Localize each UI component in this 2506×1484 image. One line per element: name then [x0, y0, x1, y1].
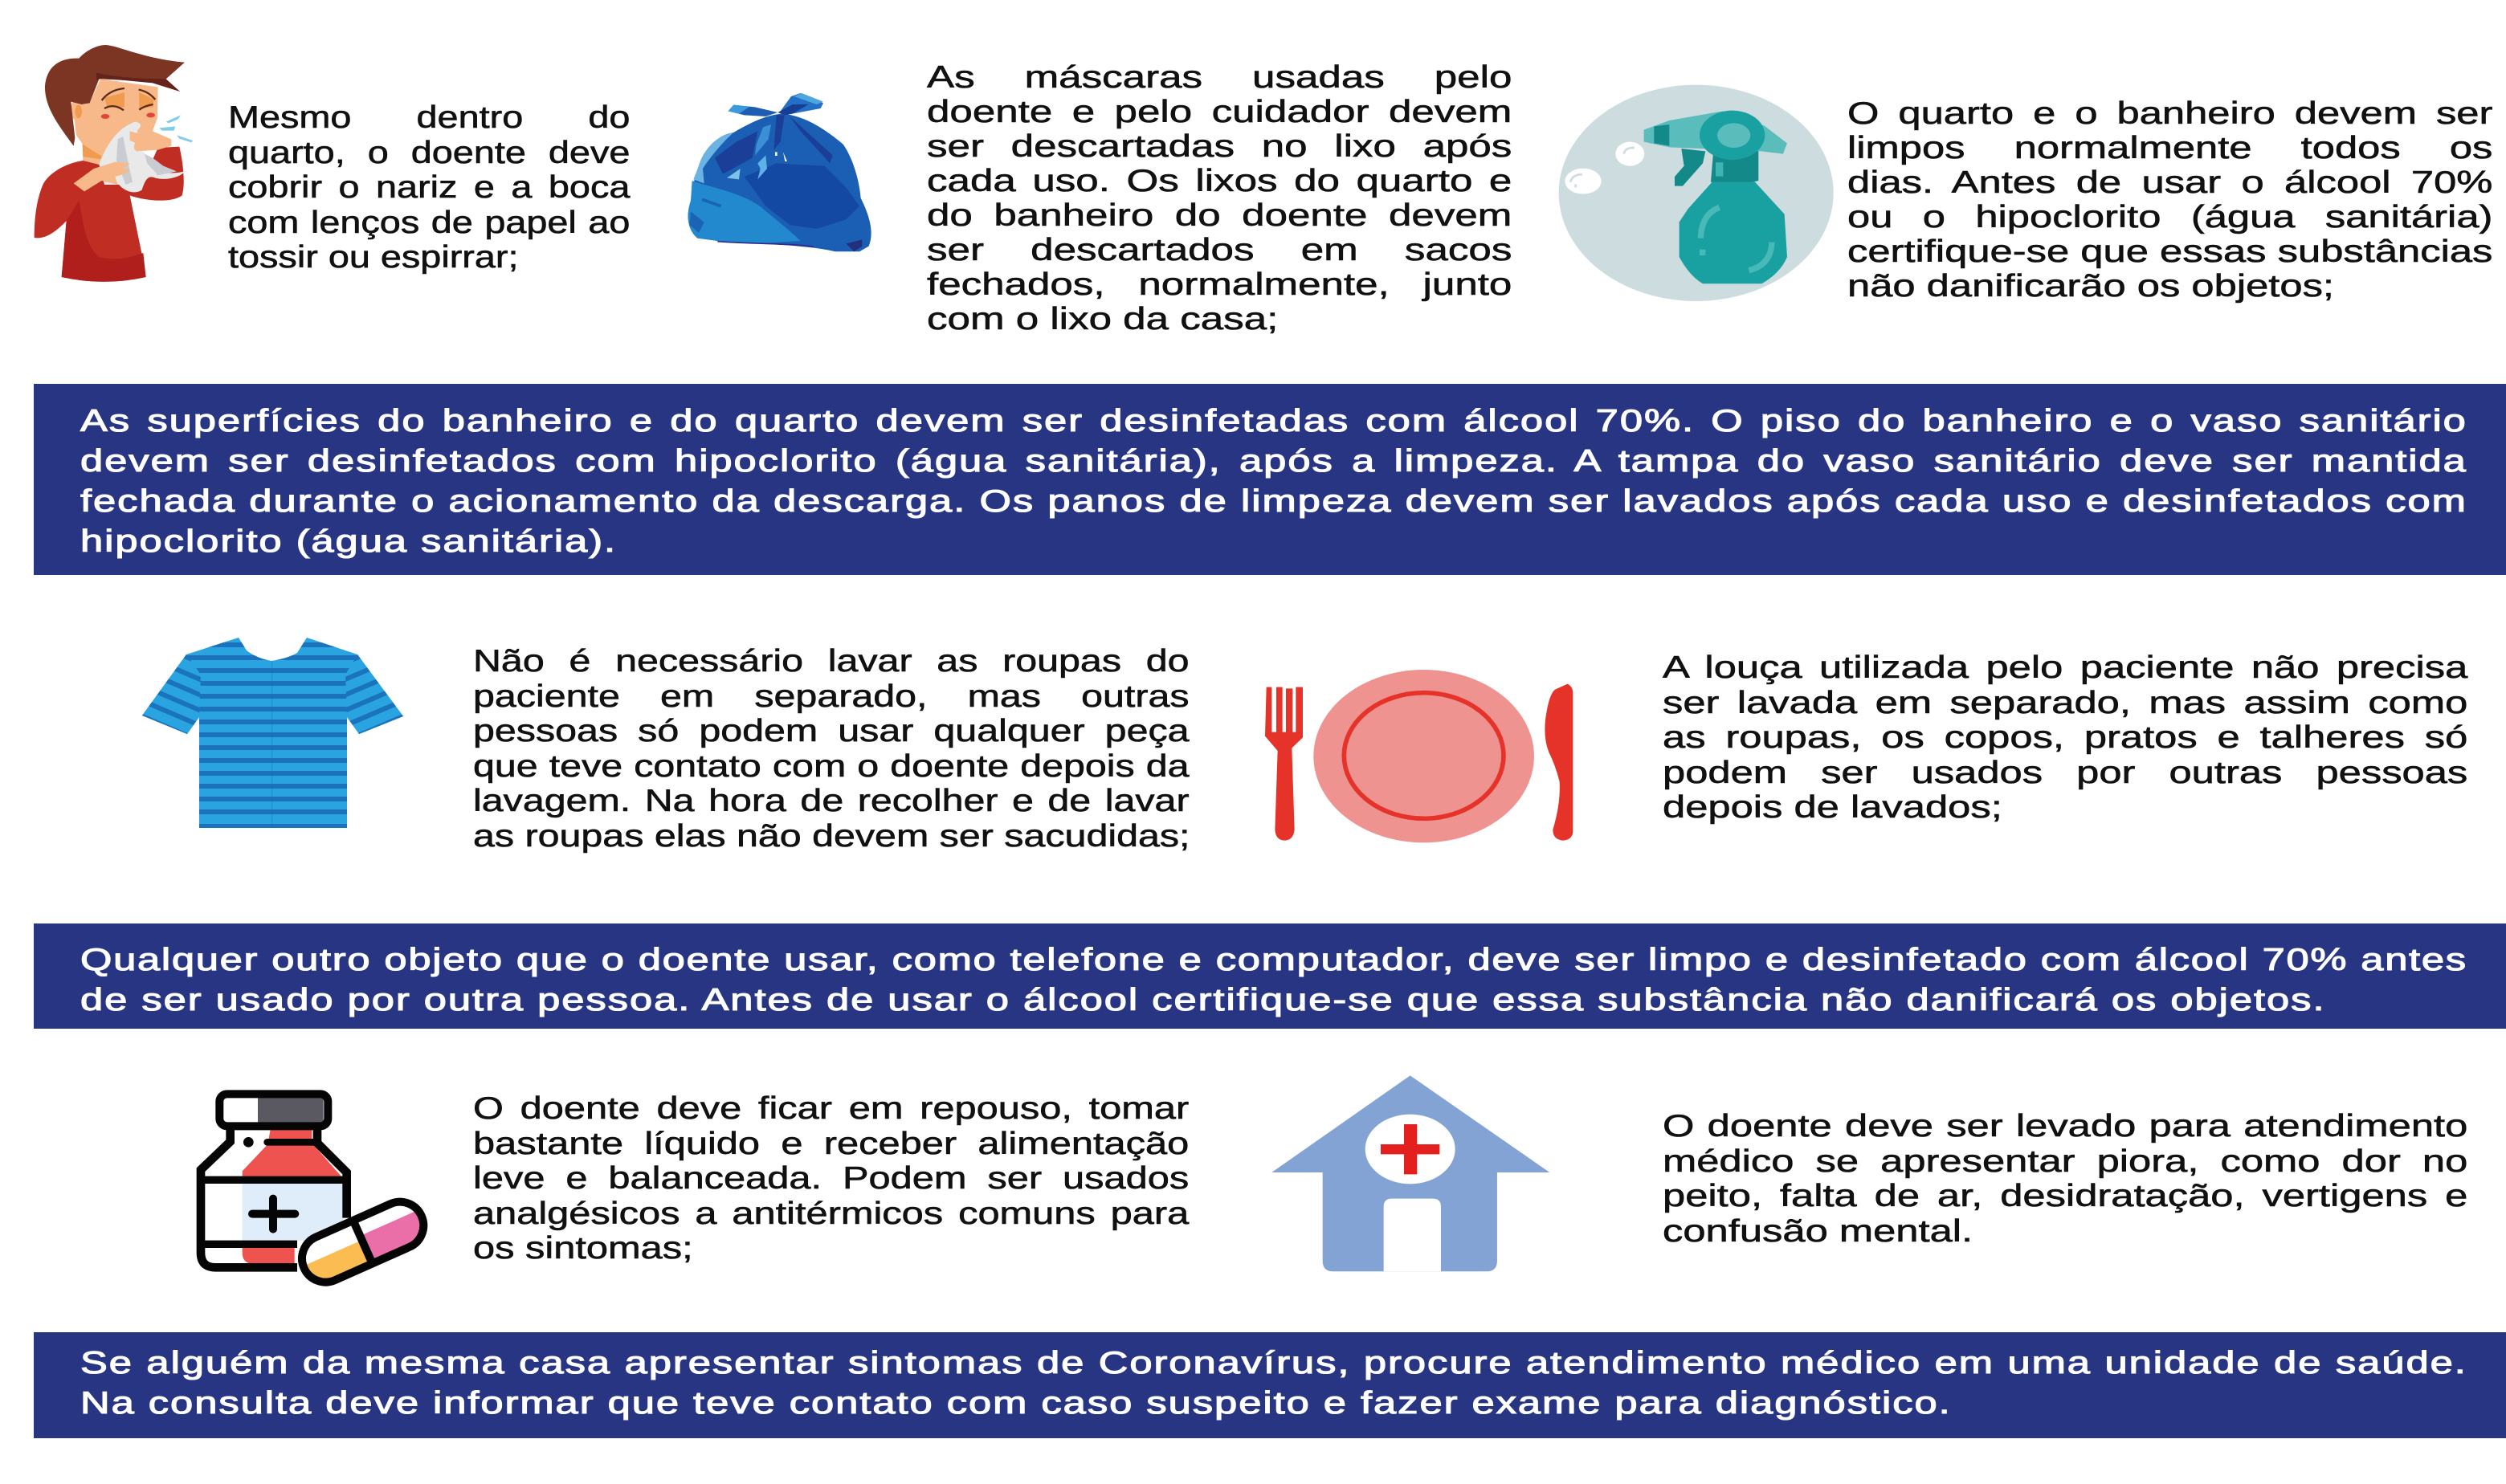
text: washing dishes: ser lavada em separado, mas assim como [1663, 686, 2467, 720]
text: used masks and trash: cada uso. Os lixos do quarto e [927, 164, 1512, 198]
text: rest and medication: os sintomas; [473, 1231, 693, 1266]
text: washing clothes [473, 644, 1190, 853]
text: washing dishes: A louça utilizada pelo paciente não precisa [1663, 650, 2467, 685]
banner text: disinfecting surfaces [80, 404, 2467, 559]
text: when to seek care: O doente deve ser levado para atendimento [1663, 1109, 2467, 1144]
text: washing clothes: que teve contato com o doente depois da [473, 748, 1190, 784]
text: cover nose and mouth: cobrir o nariz e a boca [228, 170, 630, 205]
text: cleaning room and bathroom: limpos normalmente todos os [1847, 131, 2492, 165]
banner text: symptoms in household: Na consulta deve informar que teve contato com caso suspeito e fazer exame para diagnóstico. [80, 1386, 1952, 1421]
icon: striped blue t-shirt [137, 638, 409, 828]
text: rest and medication: O doente deve ficar em repouso, tomar [473, 1091, 1189, 1126]
text: when to seek care: confusão mental. [1663, 1214, 1973, 1248]
text: washing dishes: as roupas, os copos, pratos e talheres só [1663, 720, 2467, 755]
text: cleaning room and bathroom: ou o hipoclorito (água sanitária) [1847, 200, 2492, 234]
text: washing clothes: as roupas elas não devem ser sacudidas; [473, 819, 1190, 853]
text: used masks and trash [927, 60, 1512, 336]
text: cleaning room and bathroom [1847, 96, 2492, 304]
text: washing dishes: depois de lavados; [1663, 790, 2002, 825]
text: washing dishes [1663, 650, 2468, 825]
banner: symptoms in household [34, 1332, 2506, 1438]
text: rest and medication: analgésicos a antitérmicos comuns para [473, 1197, 1189, 1230]
banner text: disinfecting surfaces: fechada durante o acionamento da descarga. Os panos de limpeza devem ser lavados após cada uso e desinfetados com [80, 484, 2467, 519]
icon: teal spray bottle in a pale circle [1559, 85, 1834, 301]
icon: person sneezing into a tissue [35, 45, 193, 282]
text: when to seek care: médico se apresentar piora, como dor no [1663, 1144, 2467, 1179]
text: when to seek care: peito, falta de ar, desidratação, vertigens e [1663, 1179, 2467, 1213]
icon: blue hospital house with red cross [1271, 1075, 1549, 1271]
text: cover nose and mouth: tossir ou espirrar; [228, 240, 519, 275]
text: cover nose and mouth: Mesmo dentro do [228, 100, 630, 135]
text: washing dishes: podem ser usados por outras pessoas [1663, 755, 2467, 790]
banner: disinfecting surfaces [34, 384, 2506, 575]
banner text: disinfecting surfaces: As superfícies do banheiro e do quarto devem ser desinfetadas com álcool 70%. O piso do banheiro e o vaso sanitário [80, 404, 2467, 438]
text: cover nose and mouth: quarto, o doente deve [228, 135, 630, 170]
banner text: disinfecting surfaces: hipoclorito (água sanitária). [80, 524, 617, 559]
text: used masks and trash: do banheiro do doente devem [927, 198, 1512, 233]
text: washing clothes: paciente em separado, mas outras [473, 679, 1190, 713]
banner text: other objects: de ser usado por outra pessoa. Antes de usar o álcool certifique-se que essa substância não danificará os objetos. [80, 983, 2326, 1017]
text: rest and medication [473, 1091, 1190, 1266]
banner: other objects [34, 923, 2506, 1029]
text: cover nose and mouth [228, 100, 631, 275]
text: rest and medication: bastante líquido e receber alimentação [473, 1126, 1189, 1161]
banner text: other objects: Qualquer outro objeto que o doente usar, como telefone e computador, deve ser limpo e desinfetado com álcool 70% antes [80, 943, 2467, 977]
icon: tied blue garbage bag [688, 93, 871, 251]
text: cleaning room and bathroom: O quarto e o banheiro devem ser [1847, 96, 2492, 131]
icon: medicine bottle and capsule [201, 1094, 434, 1291]
text: cleaning room and bathroom: não danificarão os objetos; [1847, 269, 2334, 304]
text: cover nose and mouth: com lenços de papel ao [228, 206, 630, 239]
text: washing clothes: lavagem. Na hora de recolher e de lavar [473, 784, 1190, 818]
text: used masks and trash: ser descartadas no lixo após [927, 129, 1512, 164]
text: used masks and trash: fechados, normalmente, junto [927, 267, 1512, 302]
text: when to seek care [1663, 1109, 2467, 1248]
banner text: symptoms in household: Se alguém da mesma casa apresentar sintomas de Coronavírus, procure atendimento médico em uma unidade de saúde. [80, 1346, 2467, 1380]
text: washing clothes: pessoas só podem usar qualquer peça [473, 714, 1190, 748]
text: cleaning room and bathroom: dias. Antes de usar o álcool 70% [1847, 165, 2492, 200]
text: used masks and trash: doente e pelo cuidador devem [927, 95, 1512, 129]
text: washing clothes: Não é necessário lavar as roupas do [473, 644, 1190, 679]
banner text: symptoms in household [80, 1346, 2467, 1421]
text: used masks and trash: ser descartados em sacos [927, 233, 1512, 267]
text: used masks and trash: As máscaras usadas pelo [927, 60, 1512, 95]
text: used masks and trash: com o lixo da casa; [927, 302, 1278, 336]
text: rest and medication: leve e balanceada. Podem ser usados [473, 1161, 1189, 1196]
text: cleaning room and bathroom: certifique-se que essas substâncias [1847, 234, 2492, 269]
icon: plate with fork and knife [1265, 670, 1573, 842]
banner text: disinfecting surfaces: devem ser desinfetados com hipoclorito (água sanitária), após a limpeza. A tampa do vaso sanitário deve ser mantida [80, 444, 2467, 479]
banner text: other objects [80, 943, 2467, 1017]
